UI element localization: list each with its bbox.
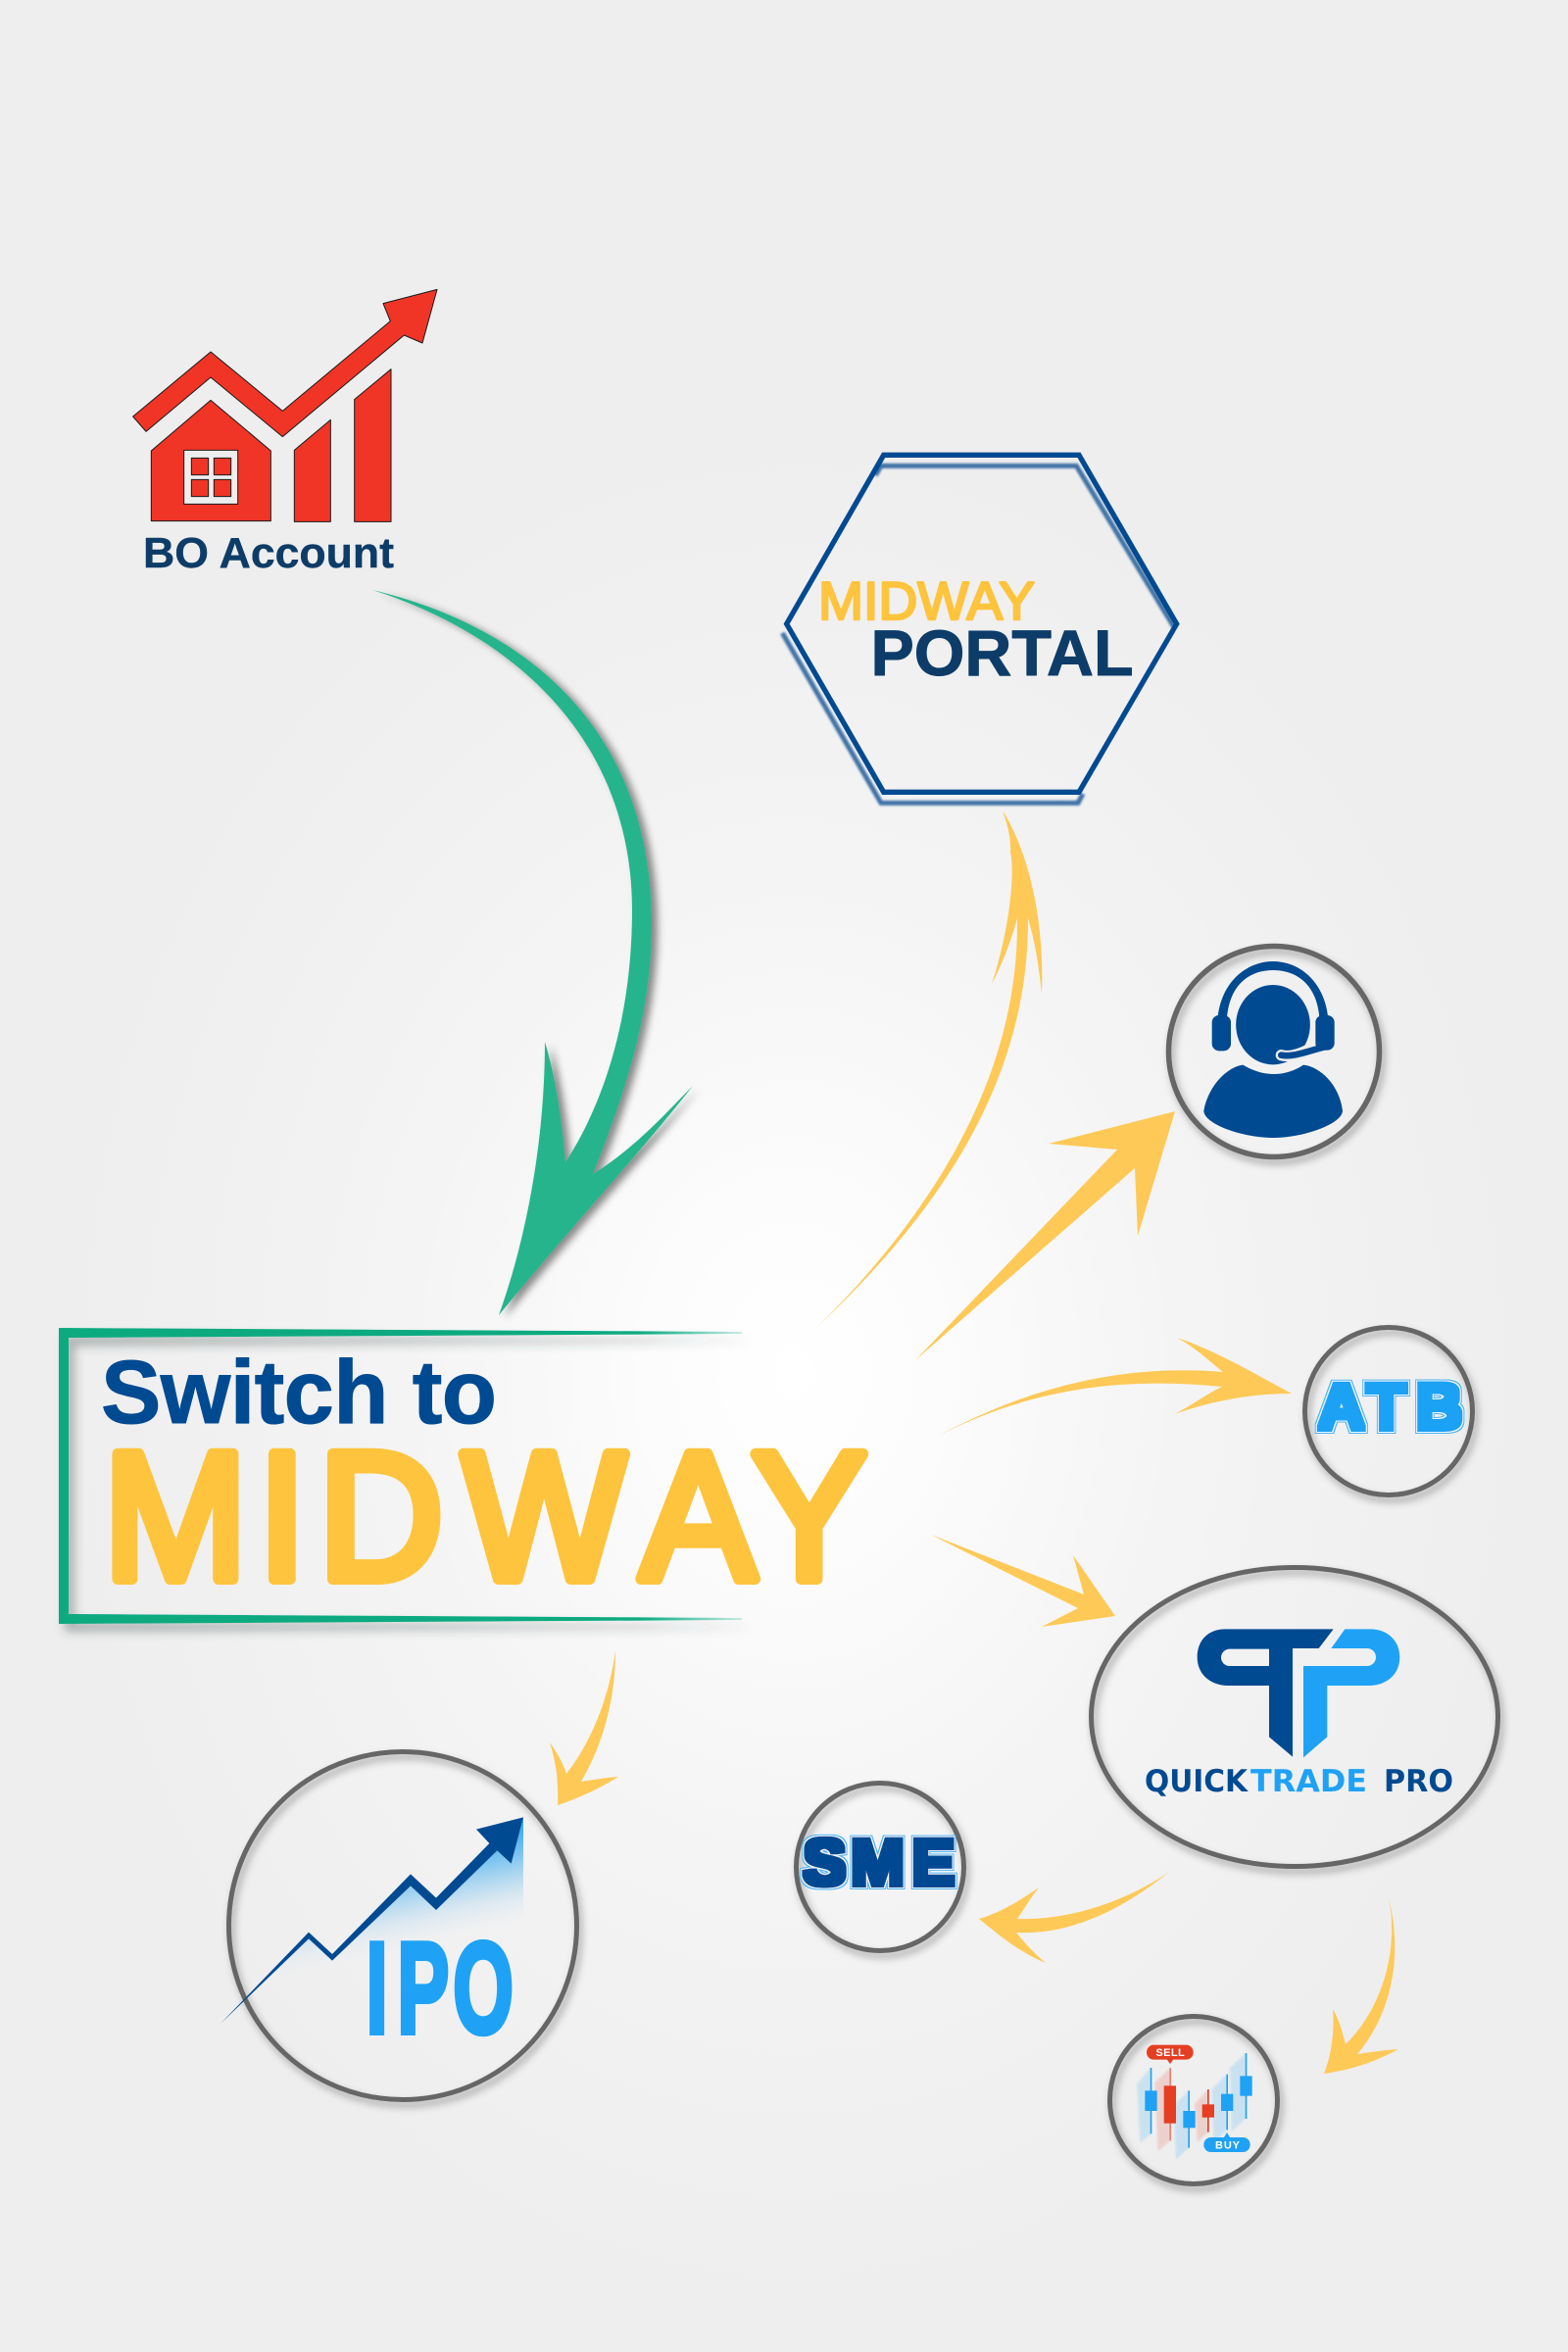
arrow: yellow from QuickTrade Pro to SME: [979, 1872, 1169, 1963]
arrow: yellow to QuickTrade Pro: [931, 1535, 1115, 1627]
text: SME: SME: [803, 1826, 955, 1898]
arrow: yellow to ATB: [929, 1338, 1292, 1441]
arrow: yellow to customer support: [915, 1111, 1175, 1360]
label: BO Account: BO Account: [143, 529, 394, 577]
panel: QuickTrade Pro ellipse: [1092, 1568, 1497, 1866]
text: Switch to: Switch to: [101, 1343, 497, 1443]
text: QuickTrade Pro wordmark: TRADE: [1250, 1764, 1367, 1799]
text: PORTAL: PORTAL: [870, 616, 1133, 689]
text: QuickTrade Pro wordmark: PRO: [1384, 1764, 1453, 1799]
arrow: green from BO Account to Switch to MIDWAY: [372, 590, 693, 1315]
panel: Switch to MIDWAY heading: [59, 1328, 866, 1624]
text: IPO: IPO: [367, 1916, 514, 2061]
ring: [1092, 1568, 1497, 1866]
icon: rising arrow roofline: [133, 289, 437, 437]
ring: [1109, 2017, 1278, 2183]
text: ATB: ATB: [1318, 1370, 1462, 1443]
panel: ATB circle: [1305, 1327, 1472, 1495]
chart: candlesticks: [1137, 2045, 1252, 2159]
panel: customer support circle: [1168, 947, 1380, 1156]
icon: agent with headset: [1203, 961, 1343, 1138]
panel: IPO circle: [220, 1752, 576, 2099]
ring: [796, 1784, 964, 1950]
label: SELL: SELL: [1155, 2047, 1185, 2059]
panel: SME circle: [796, 1784, 964, 1950]
panel: trading chart circle: [1109, 2017, 1278, 2183]
chart: rising IPO line: [220, 1817, 523, 2024]
text: QuickTrade Pro wordmark: [1145, 1764, 1453, 1799]
ring: [1168, 947, 1380, 1156]
arrow: yellow to IPO: [550, 1650, 618, 1805]
ring: [229, 1752, 576, 2099]
text: MIDWAY: MIDWAY: [818, 570, 1035, 631]
text: MIDWAY: MIDWAY: [104, 1416, 866, 1618]
icon: house: [151, 400, 270, 521]
arrow: yellow from QuickTrade Pro to trading chart: [1324, 1898, 1398, 2074]
ring: [1305, 1327, 1472, 1495]
icon: BO Account house and rising arrow: [133, 289, 437, 521]
label: BUY: BUY: [1215, 2139, 1241, 2151]
text: QuickTrade Pro wordmark: QUICK: [1145, 1764, 1249, 1799]
icon: growth bars: [294, 369, 391, 521]
hexagon outline: [787, 455, 1177, 792]
icon: QuickTrade Pro logo: [1198, 1629, 1399, 1757]
arrow: yellow to Midway Portal: [815, 810, 1042, 1329]
decorative hexagon echo top: [875, 466, 1174, 627]
panel: Midway Portal hexagon: [782, 455, 1177, 803]
frame: [59, 1328, 742, 1624]
